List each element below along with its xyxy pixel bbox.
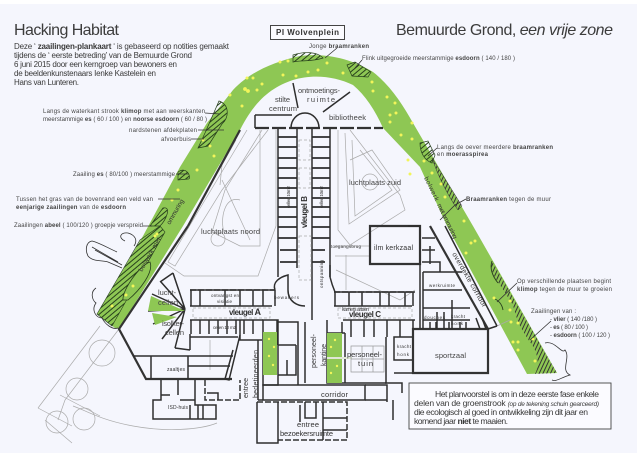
left annotations: Zaailingen abeel ( 100/120 ) groepje verspreid bbox=[14, 223, 143, 229]
right annotations: Langs de oever meerdere braamranken bbox=[437, 145, 553, 151]
left annotations: afvoerbuis bbox=[161, 137, 191, 143]
right annotations: - esdoorn ( 100 / 120 ) bbox=[550, 333, 610, 339]
room labels: bolwerk met bbox=[138, 236, 163, 273]
room labels: luchtplaats noord bbox=[201, 227, 260, 236]
room labels: ISD-huis bbox=[168, 405, 188, 411]
leader lines bbox=[143, 48, 551, 340]
right annotations: Flink uitgegroeide meerstammige esdoorn ( 140 / 180 ) bbox=[362, 56, 515, 62]
right annotations: Jonge braamranken bbox=[309, 44, 369, 50]
PI Wolvenplein label: PI Wolvenplein bbox=[276, 28, 339, 37]
left annotations: Zaailing es ( 80/100 ) meerstammige bbox=[73, 172, 176, 178]
room labels: tuin bbox=[358, 359, 373, 368]
room labels: kracht bbox=[397, 344, 412, 349]
room labels: luchtplaats zuid bbox=[349, 178, 401, 187]
room labels: honk bbox=[451, 321, 464, 326]
room labels: ontspanning bbox=[319, 260, 324, 288]
room labels: bibliotheek bbox=[329, 113, 366, 122]
right annotations: Op verschillende plaatsen begint bbox=[517, 279, 611, 285]
room labels: douches bbox=[424, 315, 446, 320]
room labels: kamers artsen bbox=[342, 307, 369, 313]
room labels: ruimte bbox=[307, 95, 335, 104]
callout box: komend jaar niet te maaien. bbox=[414, 416, 508, 426]
room labels: vleugel B bbox=[300, 196, 309, 228]
left annotations: nardstenen afdekplaten bbox=[129, 128, 197, 134]
room labels: personeel- bbox=[347, 350, 382, 359]
room labels bbox=[138, 86, 488, 438]
room labels: kracht bbox=[451, 314, 466, 319]
room labels: isolker- bbox=[162, 319, 184, 328]
room labels: overdekte corridor bbox=[450, 252, 488, 309]
callout box: delen van de groenstrook (op de tekening schuin gearceerd) bbox=[414, 398, 599, 408]
green patches in the courtyards bbox=[263, 332, 352, 383]
intro text: 6 juni 2015 door een kerngroep van bewoners en bbox=[14, 60, 177, 69]
room labels: honk bbox=[397, 352, 410, 357]
room labels: lucht- bbox=[158, 288, 176, 297]
callout box bbox=[409, 383, 611, 429]
callout box: Het planvoorstel is om in deze eerste fase enkele bbox=[435, 389, 599, 399]
left annotations: Tussen het gras van de bovenrand een veld van bbox=[16, 197, 153, 203]
room labels: ontmoetings- bbox=[298, 86, 340, 95]
room labels: cellen 10m2 bbox=[286, 186, 291, 208]
room labels: ommuring bbox=[166, 198, 186, 226]
room labels: entree bbox=[297, 420, 319, 429]
left annotations: Langs de waterkant strook klimop met aan weerskanten bbox=[43, 109, 205, 115]
intro text bbox=[14, 42, 230, 87]
room labels: personeel- bbox=[311, 333, 318, 368]
intro text: de beeldenkunstenaars Ienke Kastelein en bbox=[14, 69, 156, 78]
room labels: cellen bbox=[165, 328, 184, 337]
intro text: Deze ‘ zaailingen-plankaart ‘ is gebaseerd op notities gemaakt bbox=[14, 42, 230, 51]
hatched zones in green strip bbox=[97, 53, 557, 374]
room labels: cellen 10m2 bbox=[319, 186, 324, 208]
intro text: Hans van Lunteren. bbox=[14, 78, 79, 87]
room labels: bezoekersruimte bbox=[280, 429, 333, 438]
room labels: bolwerk bbox=[422, 176, 440, 203]
room labels: ilm kerkzaal bbox=[374, 245, 413, 252]
left annotations: meerstammige es ( 60 / 100 ) en noorse esdoorn ( 60 / 80 ) bbox=[43, 117, 207, 123]
room labels: kantine bbox=[321, 344, 328, 366]
room labels: entree bbox=[243, 378, 250, 398]
thin grey lines: courtyards and paths bbox=[38, 130, 510, 443]
right annotations: - es ( 80 / 100 ) bbox=[550, 325, 588, 331]
right annotations: Braamranken tegen de muur bbox=[466, 197, 551, 203]
corridor dashed markers bbox=[193, 140, 412, 318]
room labels: zaaltjes bbox=[167, 367, 186, 373]
room labels: bewakers bbox=[274, 295, 300, 300]
title right: Bemuurde Grond, een vrije zone bbox=[396, 22, 613, 39]
intro text: tijdens de ‘ eerste betreding’ van de Bemuurde Grond bbox=[14, 51, 192, 60]
callout box: die ecologisch al goed in ontwikkeling zijn dit jaar en bbox=[414, 407, 588, 417]
room labels: corridor bbox=[321, 390, 348, 399]
yellow seedlings dots bbox=[110, 60, 536, 362]
right annotations bbox=[309, 44, 612, 339]
room labels: toegangsbrug bbox=[331, 244, 361, 249]
tree scribbles bbox=[86, 233, 570, 381]
room labels: ontvangst en bbox=[211, 293, 239, 298]
green strip: bulwark meadow bbox=[97, 55, 557, 374]
room labels: met ommuring bbox=[435, 203, 458, 240]
room labels: werkruimte bbox=[429, 283, 455, 288]
right annotations: en moerasspirea bbox=[437, 152, 489, 158]
room labels: stilte bbox=[275, 95, 290, 104]
room labels: cellen 10 m2 bbox=[213, 325, 236, 330]
title: Hacking Habitat bbox=[14, 22, 120, 39]
room labels: cellen bbox=[158, 298, 178, 307]
room labels: sportzaal bbox=[435, 351, 466, 360]
room labels: centrum bbox=[269, 104, 297, 113]
left annotations bbox=[14, 109, 207, 229]
personeelstuin grid bbox=[351, 346, 384, 372]
room labels: vleugel A bbox=[229, 307, 262, 317]
room labels: vleugel C bbox=[349, 310, 381, 319]
right annotations: Zaailingen van : bbox=[531, 309, 576, 315]
vleugel B cell rungs bbox=[278, 137, 330, 262]
left annotations: eenjarige zaailingen van de esdoorn bbox=[16, 205, 126, 211]
room labels: visiatie bbox=[217, 299, 232, 304]
PI Wolvenplein label bbox=[270, 26, 344, 40]
building plan walls bbox=[119, 83, 497, 443]
room labels: bedetineerden bbox=[253, 350, 260, 398]
right annotations: - vlier ( 140 /180 ) bbox=[550, 317, 597, 323]
right annotations: klimop tegen de muur te groeien bbox=[517, 287, 612, 293]
